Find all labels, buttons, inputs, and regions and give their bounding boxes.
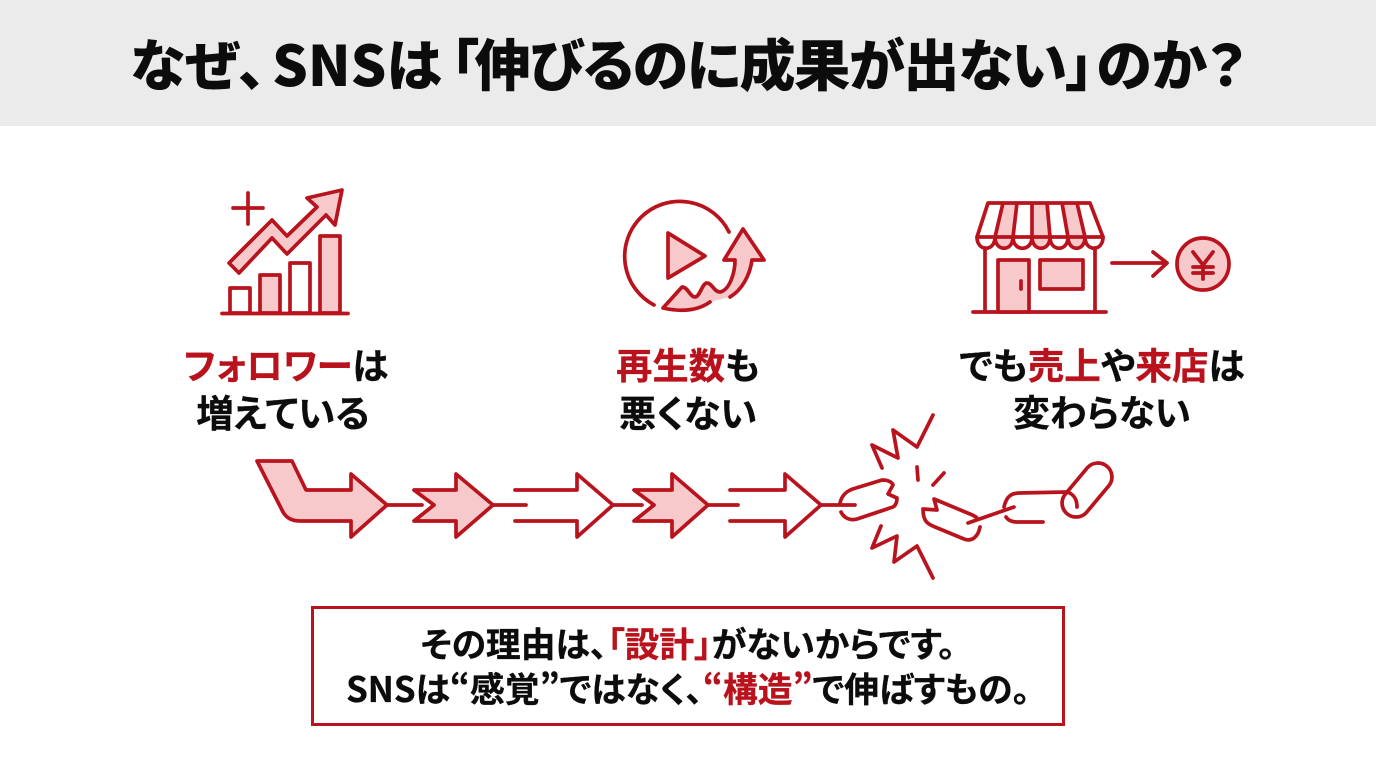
label: views: 再生数も <box>616 338 760 390</box>
label: followers line 2: 増えている <box>196 383 370 438</box>
arrow 2 <box>414 474 493 537</box>
arrow 4 <box>634 474 708 537</box>
callout box <box>311 606 1065 726</box>
process arrows chain <box>257 461 855 537</box>
label: views line 2: 悪くない <box>619 384 757 438</box>
arrow 1 <box>257 461 387 537</box>
callout line 1: その理由は、「設計」がないからです。 <box>421 618 955 668</box>
header band <box>0 0 1376 126</box>
callout line 2: SNSは“感覚”ではなく、“構造”で伸ばすもの。 <box>346 663 1030 713</box>
icon: growth chart <box>222 190 348 314</box>
icon: play views rising <box>625 201 764 310</box>
label: sales: でも売上や来店は <box>959 337 1245 390</box>
broken chain <box>840 415 1118 578</box>
icon: store to yen <box>973 203 1229 312</box>
title: なぜ、SNSは「伸びるのに成果が出ない」のか？ <box>130 22 1246 103</box>
arrow 5 <box>730 474 855 537</box>
arrow 3 <box>515 474 642 537</box>
label: followers: フォロワーは <box>184 338 388 390</box>
label: sales line 2: 変わらない <box>1013 384 1191 437</box>
